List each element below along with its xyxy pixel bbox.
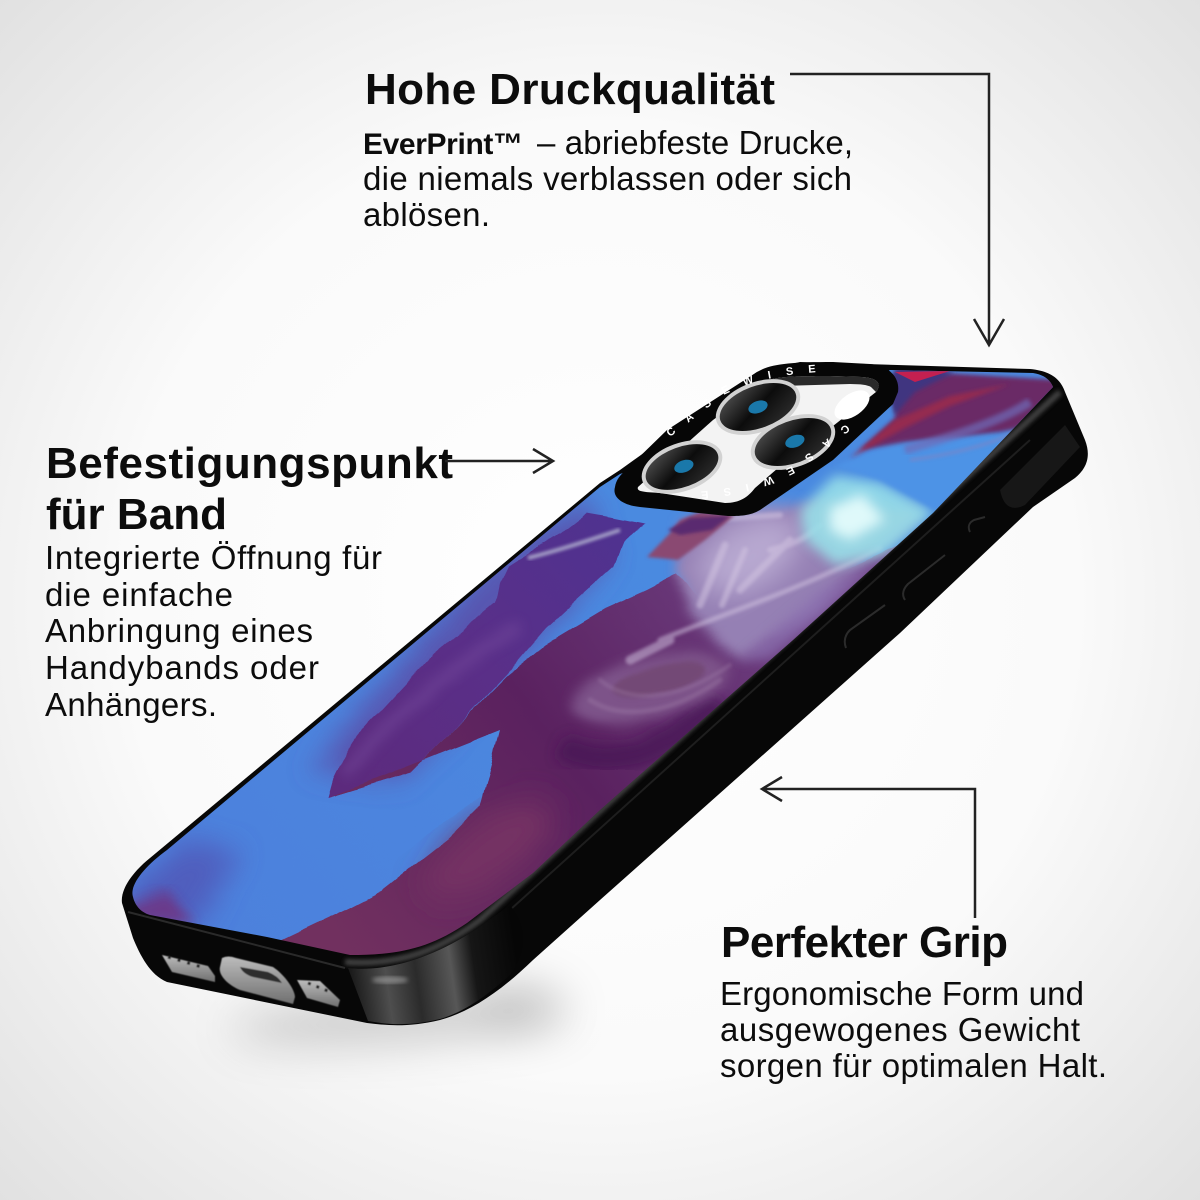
art: fur body [677,500,923,660]
lens right [743,403,843,481]
lens top [708,368,808,446]
body text [363,124,853,233]
art: swirl strokes [590,665,730,712]
art: plum main shape [281,546,897,955]
ring text bottom: CASEWISE [702,426,849,499]
arrow [790,74,1004,345]
usb port [220,956,295,1004]
art: lavender chest swirl [566,648,731,729]
callout: print quality [363,65,1004,345]
art: maroon glow [413,796,554,892]
art: icy highlight [800,475,935,565]
body text: – abriebfeste Drucke, [537,124,853,161]
speaker right [297,980,340,1007]
art: blue swirl [905,402,1030,450]
art: fur glow [690,500,806,603]
upper side grip [1000,425,1080,508]
case art [132,370,1053,955]
heading: Perfekter Grip [721,918,1008,967]
case body [122,362,1088,1025]
art: violet fish shape [328,512,645,798]
corner reflection [348,905,523,1024]
flash [829,385,875,425]
speaker left holes [168,957,205,968]
art: fish lights [345,625,520,775]
camera bump [614,362,898,516]
art: white stripe on fish [528,530,620,558]
corner highlight [372,976,408,984]
body text: Integrierte Öffnung für [45,539,382,576]
art: violet halo around shape [310,495,610,780]
camera window [638,376,879,503]
speaker right holes [308,983,333,993]
bottom rim line [128,912,345,968]
art: fur strokes [630,515,880,660]
phone shadow [229,981,571,1051]
callout: strap attachment [45,439,553,723]
body text: die einfache [45,576,233,613]
art: lavender bottom fade [748,570,870,664]
art: head and snout [647,512,735,560]
art: upper plum [860,370,1060,450]
lens left [634,430,730,504]
ring text top: CASEWISE [667,364,816,436]
side bevel highlight [345,392,1060,963]
ports [162,955,340,1007]
arrow [762,777,975,918]
art: lower left haze [125,840,240,925]
callout: grip [720,777,1107,1084]
art: red streak [850,384,1010,458]
body text: Handybands oder [45,649,319,686]
art: upper blue [848,426,1016,511]
heading: Hohe Druckqualität [365,65,775,114]
body text: Anbringung eines [45,612,313,649]
arrow [445,449,553,473]
art: dark swirl [560,700,720,758]
body text [720,975,1107,1084]
art: blue base [132,370,1053,940]
art: blue wisps [910,430,1020,460]
heading: für Band [46,490,227,539]
body text: Ergonomische Form und [720,975,1084,1012]
side inner groove [490,440,1030,928]
body text: Anhängers. [45,686,217,723]
side buttons [845,517,985,648]
body text: ablösen. [363,196,490,233]
heading: Befestigungspunkt [46,439,453,488]
body text: ausgewogenes Gewicht [720,1011,1080,1048]
body text [45,539,382,723]
window inner shadow [767,376,879,392]
art: dark top corner [890,370,954,415]
speaker left [162,955,215,982]
phone with painted case [122,362,1088,1026]
bump frame [614,362,898,516]
usb opening [240,967,282,983]
body text: EverPrint™ [363,128,523,161]
heading [46,439,453,539]
body text: sorgen für optimalen Halt. [720,1047,1107,1084]
body text: die niemals verblassen oder sich [363,160,852,197]
